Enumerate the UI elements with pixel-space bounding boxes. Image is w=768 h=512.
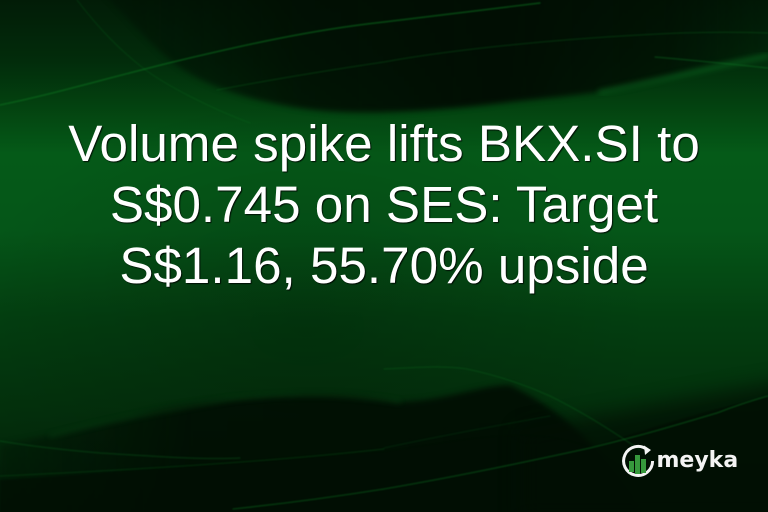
title [68, 114, 700, 295]
logo: meyka [622, 444, 738, 477]
icon: ring with bars [622, 444, 654, 477]
title: S$1.16, 55.70% upside [119, 237, 649, 294]
bottom darker lower field [0, 396, 768, 512]
lower-right dark fade [520, 380, 768, 512]
bottom dark swoosh [0, 385, 650, 512]
top dark swoosh [100, 0, 768, 112]
title: Volume spike lifts BKX.SI to [68, 114, 700, 172]
title: S$0.745 on SES: Target [110, 176, 658, 233]
wordmark: meyka [656, 448, 738, 473]
